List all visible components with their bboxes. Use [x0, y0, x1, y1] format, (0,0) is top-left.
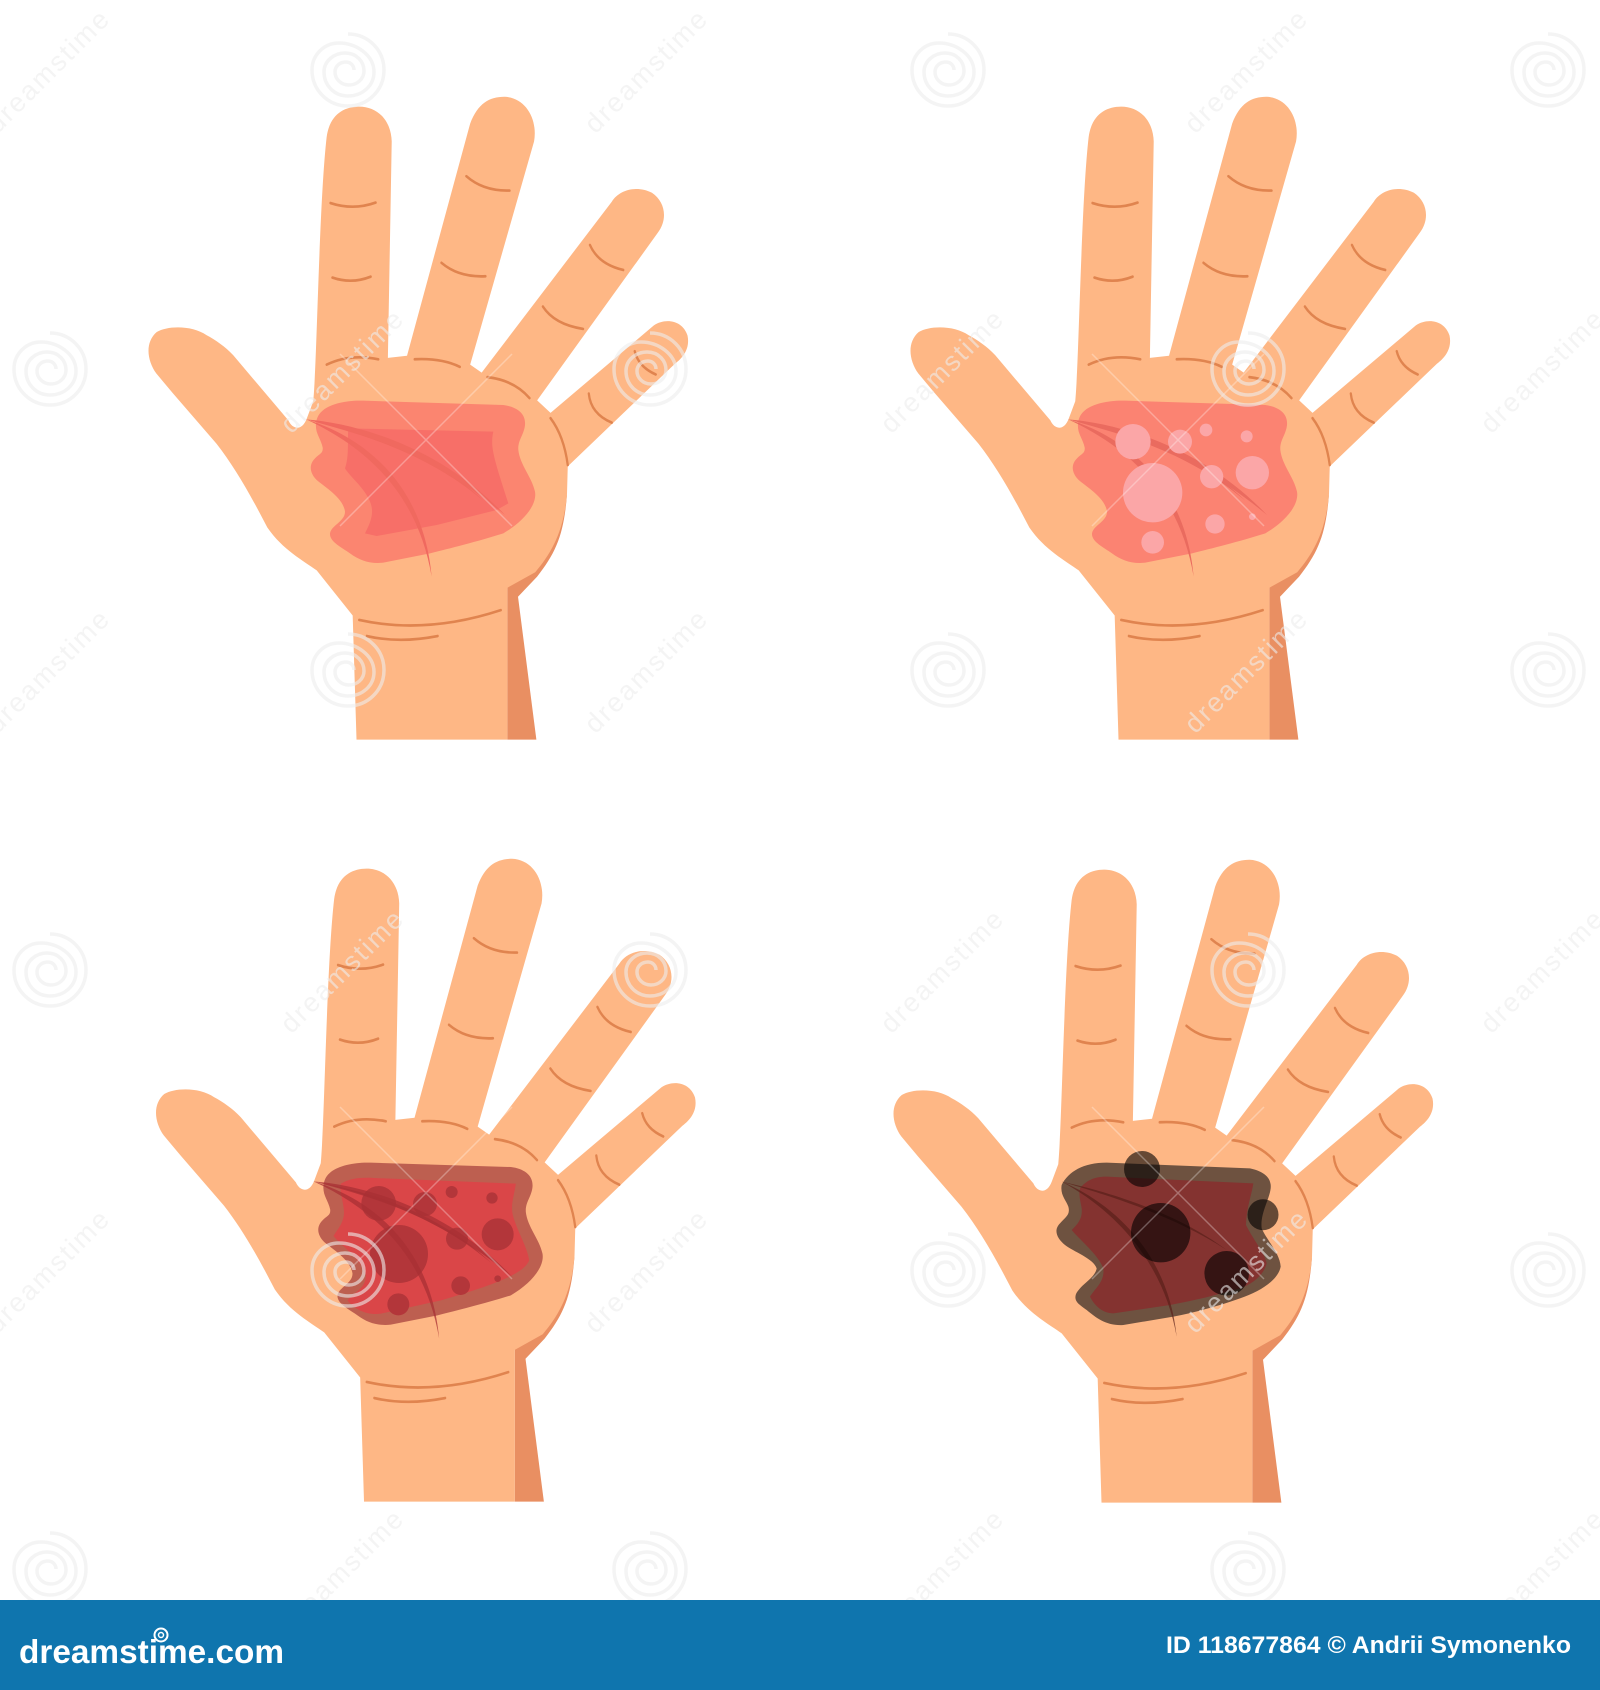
hand shape: [156, 859, 696, 1502]
watermark overlay: dreamstime: [578, 4, 713, 139]
watermark overlay: dreamstime: [874, 904, 1009, 1039]
hand shape: [911, 97, 1450, 740]
hand 1: first-degree burn: [149, 97, 688, 740]
watermark overlay: dreamstime: [578, 1204, 713, 1339]
watermark overlay: dreamstime: [1178, 1204, 1313, 1339]
watermark overlay: dreamstime: [1178, 4, 1313, 139]
charred spots: [1124, 1151, 1278, 1296]
footer logo: dreamstime.com: [19, 1633, 284, 1670]
blisters: [1115, 424, 1269, 554]
hand 3: third-degree burn: [156, 859, 696, 1502]
dark lesions: [361, 1186, 514, 1315]
hand shape: [149, 97, 688, 740]
hand shape: [894, 860, 1433, 1503]
watermark overlay: dreamstime: [274, 904, 409, 1039]
hand 4: fourth-degree charred burn: [894, 860, 1433, 1503]
watermark overlay: dreamstime: [874, 1504, 1009, 1639]
hand 2: second-degree burn with blisters: [911, 97, 1450, 740]
footer credit: ID 118677864 © Andrii Symonenko: [1166, 1632, 1571, 1659]
watermark overlay: dreamstime: [1178, 604, 1313, 739]
burn patch: [318, 1163, 543, 1325]
burn creases: [313, 1181, 512, 1339]
watermark overlay: dreamstime: [578, 604, 713, 739]
burn patch: [306, 401, 535, 577]
watermark overlay: dreamstime: [274, 1504, 409, 1639]
burn patch: [1056, 1163, 1281, 1337]
burn patch: [1068, 401, 1297, 577]
watermark overlay: dreamstime: [274, 304, 409, 439]
watermark overlay: dreamstime: [874, 304, 1009, 439]
footer bar: [0, 1600, 1600, 1690]
